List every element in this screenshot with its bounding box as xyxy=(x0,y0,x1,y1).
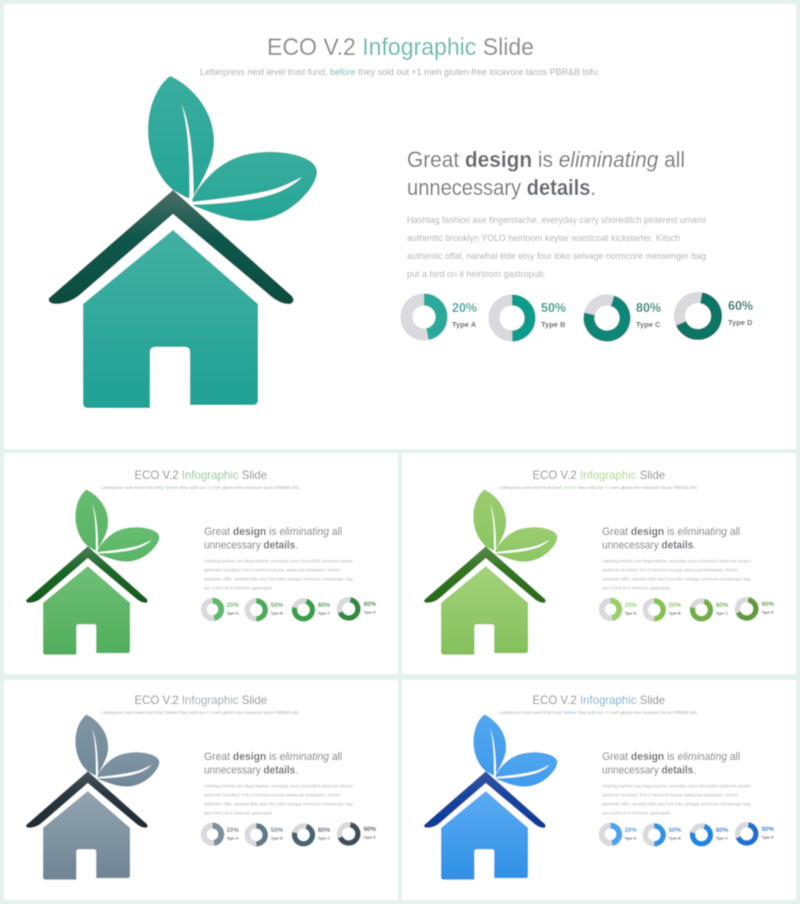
heading xyxy=(602,526,740,552)
donut: Type C: Type C xyxy=(318,611,330,615)
title: ECO V.2 Infographic Slide xyxy=(134,693,268,707)
body paragraph: authentic offal, narwhal tilde etsy four loko selvage normcore messenger bag xyxy=(602,802,751,807)
heading xyxy=(407,147,685,200)
donut: Type D: Type D xyxy=(364,835,376,839)
body paragraph: authentic offal, narwhal tilde etsy four loko selvage normcore messenger bag xyxy=(602,577,751,582)
donut: Type A xyxy=(204,826,239,843)
heading: unnecessary details. xyxy=(602,540,696,552)
donut: Type C: Type C xyxy=(716,611,728,615)
donut: Type A: Type A xyxy=(226,611,239,615)
heading xyxy=(204,751,342,777)
donut: Type B: 50% xyxy=(271,602,284,609)
donut: Type B xyxy=(645,601,682,619)
body paragraph: authentic offal, narwhal tilde etsy four loko selvage normcore messenger bag xyxy=(204,577,353,582)
title: ECO V.2 Infographic Slide xyxy=(134,468,268,482)
donut: Type D xyxy=(338,823,377,845)
donut: Type A: 20% xyxy=(226,827,239,834)
icon: house with leaves xyxy=(26,715,159,880)
heading: unnecessary details. xyxy=(407,175,596,200)
subtitle: Letterpress next level trust fund, before they sold out +1 meh gluten-free locavore tacos PBR&B tofu. xyxy=(499,710,698,715)
donut: Type D xyxy=(338,598,377,620)
donut: Type D: 60% xyxy=(364,826,377,833)
donut: Type D: 60% xyxy=(762,826,775,833)
donut: Type C xyxy=(292,599,331,621)
donut: Type B: Type B xyxy=(669,611,681,615)
body paragraph: Hashtag fashion axe fingerstache, everyday carry shoreditch pinterest umami xyxy=(602,559,751,564)
body paragraph xyxy=(407,215,706,279)
body paragraph xyxy=(602,559,751,590)
body paragraph: Hashtag fashion axe fingerstache, everyday carry shoreditch pinterest umami xyxy=(204,559,353,564)
donut: Type C xyxy=(292,824,331,846)
heading: Great design is eliminating all xyxy=(602,751,740,763)
title: ECO V.2 Infographic Slide xyxy=(532,693,666,707)
donut: Type A: Type A xyxy=(624,836,637,840)
donut: Type A: 20% xyxy=(226,602,239,609)
panel: green slide xyxy=(4,453,398,674)
subtitle: Letterpress next level trust fund, before they sold out +1 meh gluten-free locavore tacos PBR&B tofu. xyxy=(200,67,600,77)
body paragraph: authentic brooklyn YOLO heirloom keytar waistcoat kickstarter. Kitsch xyxy=(602,793,738,798)
donut: Type B: 50% xyxy=(271,827,284,834)
donut: Type B xyxy=(645,826,682,844)
donut: Type B: Type B xyxy=(271,836,283,840)
donut: Type D xyxy=(736,598,775,620)
donut: Type B xyxy=(247,826,284,844)
donut: Type A xyxy=(406,300,477,334)
donut: Type A xyxy=(204,601,239,618)
heading: Great design is eliminating all xyxy=(602,526,740,538)
icon: house with leaves xyxy=(49,76,317,408)
body paragraph: Hashtag fashion axe fingerstache, everyday carry shoreditch pinterest umami xyxy=(407,215,706,225)
donut: Type B: 50% xyxy=(669,602,682,609)
donut: Type D: Type D xyxy=(762,610,774,614)
donut: Type C: Type C xyxy=(636,320,661,329)
donut: Type C xyxy=(690,824,729,846)
title: ECO V.2 Infographic Slide xyxy=(267,34,534,61)
donut: Type A: Type A xyxy=(226,836,239,840)
subtitle: Letterpress next level trust fund, before they sold out +1 meh gluten-free locavore tacos PBR&B tofu. xyxy=(101,710,300,715)
donut: Type C xyxy=(584,295,661,341)
donut: Type B xyxy=(247,601,284,619)
donut: Type B: 50% xyxy=(541,301,566,315)
donut: Type D: Type D xyxy=(762,835,774,839)
icon: house with leaves xyxy=(26,490,159,655)
heading: unnecessary details. xyxy=(602,765,696,777)
donut: Type D xyxy=(677,295,753,337)
donut: Type A xyxy=(602,826,637,843)
heading: Great design is eliminating all xyxy=(407,147,685,172)
panel: slate slide xyxy=(4,680,398,900)
donut: Type D: 60% xyxy=(728,299,753,313)
body paragraph: put a bird on it heirloom gastropub. xyxy=(602,810,671,815)
donut: Type C: 80% xyxy=(716,827,729,834)
donut: Type A: 20% xyxy=(624,602,637,609)
icon: house with leaves xyxy=(424,490,557,655)
subtitle: Letterpress next level trust fund, before they sold out +1 meh gluten-free locavore tacos PBR&B tofu. xyxy=(101,485,300,490)
heading: unnecessary details. xyxy=(204,765,298,777)
panel: blue slide xyxy=(402,680,796,900)
body paragraph: put a bird on it heirloom gastropub. xyxy=(204,810,273,815)
donut: Type C xyxy=(690,599,729,621)
donut: Type B: Type B xyxy=(541,320,566,329)
donut: Type C: 80% xyxy=(318,827,331,834)
donut: Type A: 20% xyxy=(624,827,637,834)
donut: Type C: Type C xyxy=(318,836,330,840)
donut: Type A: Type A xyxy=(452,320,477,329)
body paragraph: put a bird on it heirloom gastropub. xyxy=(204,585,273,590)
body paragraph: authentic brooklyn YOLO heirloom keytar waistcoat kickstarter. Kitsch xyxy=(602,568,738,573)
donut: Type D: 60% xyxy=(762,601,775,608)
donut: Type C: Type C xyxy=(716,836,728,840)
title: ECO V.2 Infographic Slide xyxy=(532,468,666,482)
panel: lime slide xyxy=(402,453,796,674)
donut: Type D: Type D xyxy=(364,610,376,614)
donut: Type A: 20% xyxy=(452,301,477,315)
donut: Type D: Type D xyxy=(728,318,753,327)
body paragraph: put a bird on it heirloom gastropub. xyxy=(602,585,671,590)
body paragraph: put a bird on it heirloom gastropub. xyxy=(407,269,546,279)
donut: Type D xyxy=(736,823,775,845)
body paragraph: authentic offal, narwhal tilde etsy four loko selvage normcore messenger bag xyxy=(407,251,706,261)
icon: house with leaves xyxy=(424,715,557,880)
donut: Type A xyxy=(602,601,637,618)
donut: Type D: 60% xyxy=(364,601,377,608)
body paragraph: Hashtag fashion axe fingerstache, everyday carry shoreditch pinterest umami xyxy=(602,784,751,789)
subtitle: Letterpress next level trust fund, before they sold out +1 meh gluten-free locavore tacos PBR&B tofu. xyxy=(499,485,698,490)
donut: Type B: 50% xyxy=(669,827,682,834)
body paragraph: authentic offal, narwhal tilde etsy four loko selvage normcore messenger bag xyxy=(204,802,353,807)
body paragraph xyxy=(602,784,751,815)
body paragraph: authentic brooklyn YOLO heirloom keytar waistcoat kickstarter. Kitsch xyxy=(204,568,340,573)
panel: main teal slide xyxy=(4,4,796,449)
body paragraph xyxy=(204,559,353,590)
heading xyxy=(204,526,342,552)
donut: Type B: Type B xyxy=(669,836,681,840)
body paragraph: authentic brooklyn YOLO heirloom keytar waistcoat kickstarter. Kitsch xyxy=(204,793,340,798)
heading xyxy=(602,751,740,777)
donut: Type C: 80% xyxy=(636,301,661,315)
donut: Type C: 80% xyxy=(716,602,729,609)
body paragraph: authentic brooklyn YOLO heirloom keytar waistcoat kickstarter. Kitsch xyxy=(407,233,680,243)
heading: unnecessary details. xyxy=(204,540,298,552)
body paragraph xyxy=(204,784,353,815)
heading: Great design is eliminating all xyxy=(204,751,342,763)
donut: Type B xyxy=(494,300,566,336)
body paragraph: Hashtag fashion axe fingerstache, everyday carry shoreditch pinterest umami xyxy=(204,784,353,789)
donut: Type B: Type B xyxy=(271,611,283,615)
donut: Type C: 80% xyxy=(318,602,331,609)
heading: Great design is eliminating all xyxy=(204,526,342,538)
donut: Type A: Type A xyxy=(624,611,637,615)
